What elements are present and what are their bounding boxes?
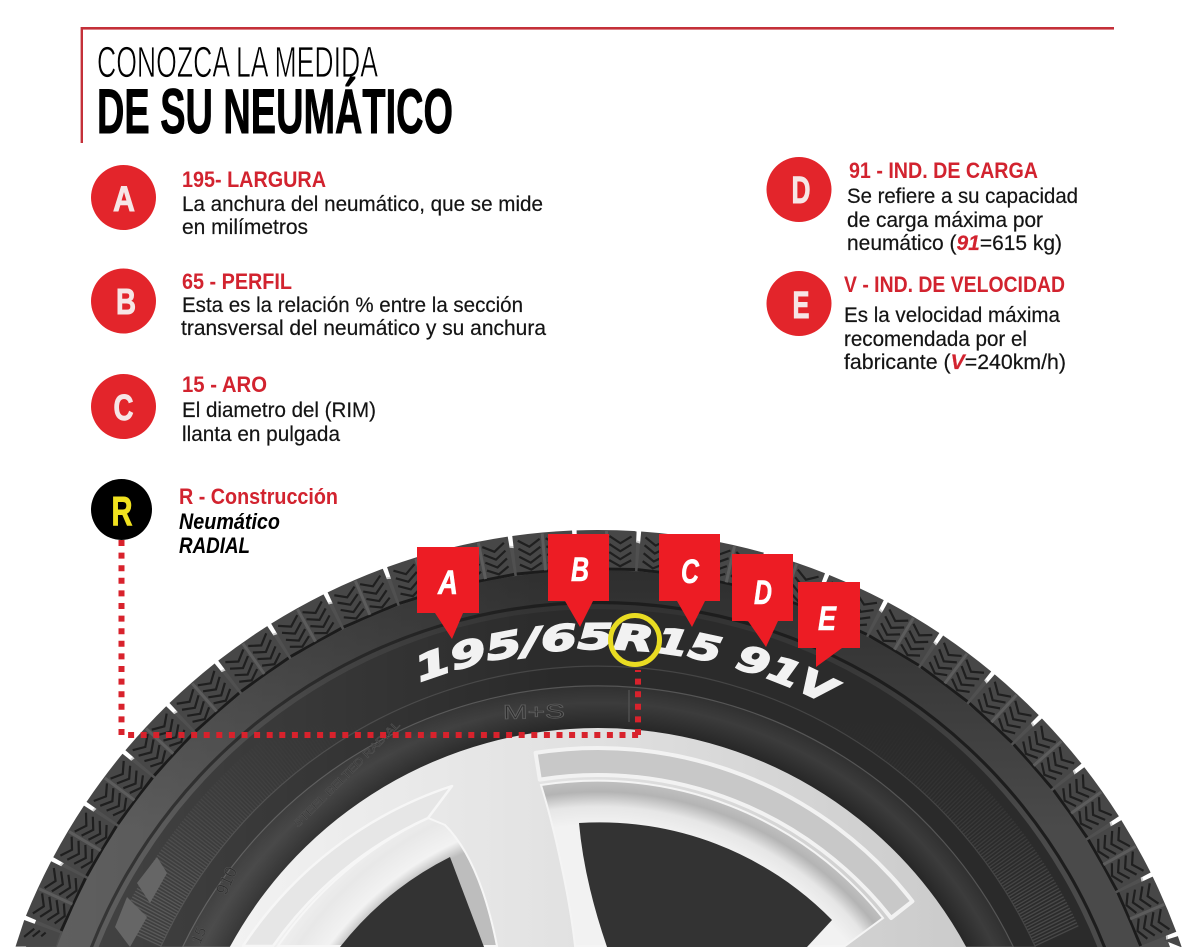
- tread blocks: [15, 529, 1182, 947]
- left window: [340, 857, 484, 947]
- item E: indice de velocidad: recomendada por el: [844, 327, 1027, 351]
- embossed mark M+S: M+S: [503, 701, 565, 724]
- item R: construccion: R - Construcción: [179, 484, 338, 509]
- title frame: [81, 27, 1114, 143]
- item C: aro: llanta en pulgada: [182, 422, 340, 446]
- item A: largura: A: [113, 180, 135, 219]
- size marking text: 195/65R: [419, 622, 652, 682]
- embossed lower-left marks: [188, 719, 403, 947]
- item B: perfil: B: [116, 281, 136, 322]
- item A: largura: La anchura del neumático, que se mide: [182, 192, 543, 216]
- item D: indice de carga: neumático (91=615 kg): [847, 231, 1062, 255]
- item D: indice de carga: Se refiere a su capacidad: [847, 184, 1078, 208]
- left panel: [243, 786, 452, 946]
- tag D: [732, 554, 793, 647]
- embossed lower-left marks: 910: [212, 864, 241, 898]
- right window: [579, 822, 832, 947]
- item R: construccion: R: [112, 488, 132, 534]
- tire: [16, 530, 1182, 947]
- title: [97, 38, 453, 147]
- shoulder band: [57, 570, 1139, 947]
- title: CONOZCA LA MEDIDA: [97, 38, 378, 87]
- embossed lower-left marks: 15: [188, 924, 210, 947]
- size marking text: [419, 622, 844, 699]
- tag E: E: [818, 600, 837, 638]
- item D: indice de carga: [766, 157, 1078, 255]
- item D: indice de carga: D: [792, 170, 810, 212]
- item C: aro: El diametro del (RIM): [182, 398, 376, 422]
- left recess: [278, 818, 497, 946]
- right panel: [536, 748, 912, 918]
- tag E: [798, 582, 860, 667]
- wheel rim: [230, 728, 966, 947]
- item A: largura: [91, 165, 543, 239]
- item R: construccion: [91, 479, 338, 558]
- left light: [57, 570, 1139, 947]
- tag C: C: [681, 553, 699, 591]
- tire base: [26, 541, 1170, 947]
- right recess: [541, 781, 883, 946]
- item E: indice de velocidad: fabricante (V=240km/h): [844, 350, 1066, 374]
- logo on sidewall: [115, 857, 167, 947]
- item D: indice de carga: 91 - IND. DE CARGA: [849, 158, 1038, 183]
- size marking text: 15 91V: [658, 628, 844, 699]
- item E: indice de velocidad: Es la velocidad máxima: [844, 303, 1060, 327]
- item C: aro: C: [114, 387, 134, 428]
- yellow ring on R: [610, 616, 660, 664]
- item R: construccion: Neumático: [179, 509, 280, 534]
- item E: indice de velocidad: [766, 271, 1066, 374]
- item B: perfil: transversal del neumático y su anchura: [181, 316, 546, 340]
- item B: perfil: [91, 268, 546, 340]
- sidewall ribs: [140, 645, 1056, 937]
- tag B: B: [571, 551, 589, 589]
- item B: perfil: Esta es la relación % entre la sección: [182, 293, 523, 317]
- item C: aro: 15 - ARO: [182, 372, 267, 397]
- item B: perfil: 65 - PERFIL: [182, 269, 292, 294]
- embossed lower-left marks: STEEL BELTED RADIAL: [292, 719, 403, 830]
- tag B: [548, 534, 609, 627]
- dotted connector from R: [122, 540, 639, 735]
- tag D: D: [754, 574, 772, 612]
- item R: construccion: RADIAL: [179, 533, 250, 558]
- tag A: [417, 547, 479, 639]
- item A: largura: 195- LARGURA: [182, 167, 326, 192]
- item E: indice de velocidad: V - IND. DE VELOCIDAD: [844, 272, 1065, 297]
- tag A: A: [437, 564, 458, 602]
- tag C: [659, 534, 720, 627]
- item E: indice de velocidad: E: [792, 285, 810, 327]
- item A: largura: en milímetros: [182, 215, 308, 239]
- item D: indice de carga: de carga máxima por: [847, 208, 1043, 232]
- title: DE SU NEUMÁTICO: [97, 77, 453, 147]
- item C: aro: [91, 372, 376, 446]
